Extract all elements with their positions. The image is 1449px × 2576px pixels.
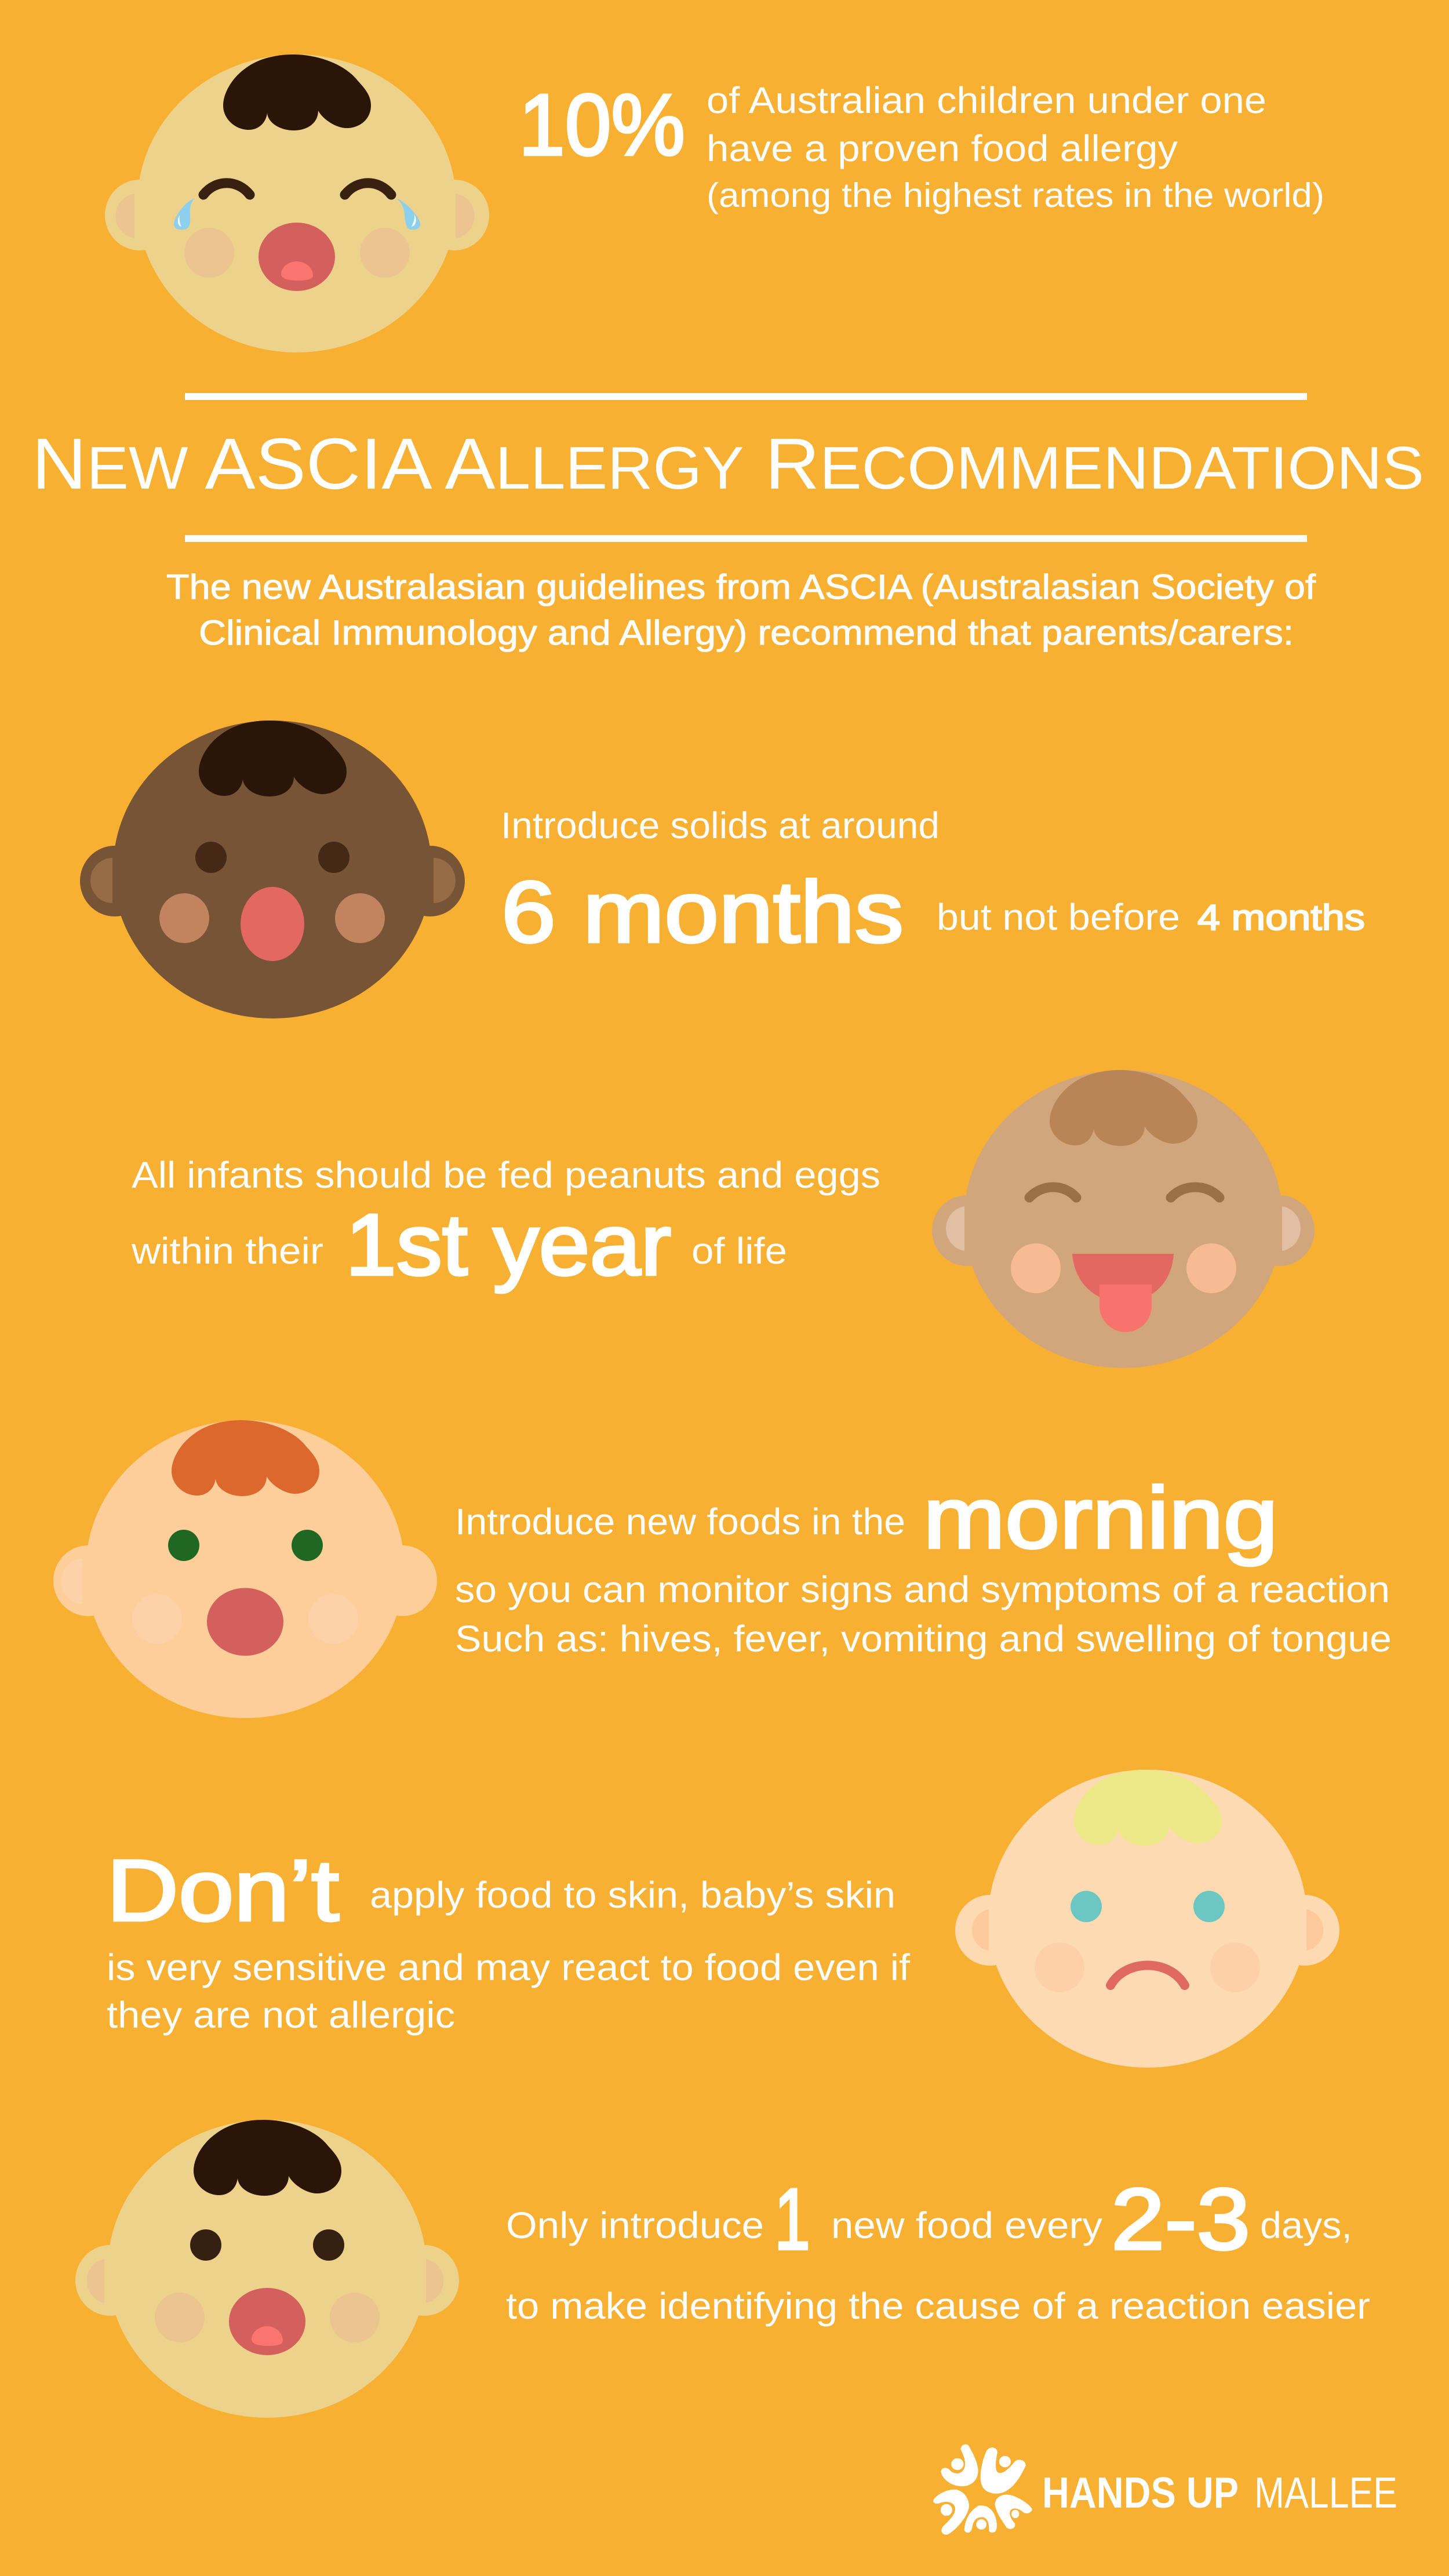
text block: allergy statistic: have a proven food allergy	[707, 128, 1178, 169]
text block: introduce in the morning: morning	[923, 1469, 1278, 1566]
icon: dark-skinned baby face	[80, 721, 465, 1018]
tongue	[1100, 1285, 1152, 1332]
cheeks	[1035, 1942, 1260, 1992]
text block: introduce solids: 4 months	[1197, 898, 1365, 938]
text block: one new food every 2-3 days: new food every	[831, 2204, 1102, 2246]
text block: peanuts and eggs: within their	[131, 1230, 323, 1272]
text block: introduce in the morning: so you can monitor signs and symptoms of a reaction	[455, 1569, 1390, 1610]
text block: peanuts and eggs: All infants should be fed peanuts and eggs	[132, 1154, 880, 1196]
cheeks	[155, 2293, 380, 2342]
mouth	[207, 1588, 283, 1656]
mouth	[1072, 1254, 1174, 1302]
text block: don't apply food to skin: they are not allergic	[107, 1994, 455, 2036]
text block: don't apply food to skin	[107, 1842, 910, 2036]
text block: introduce solids: 6 months	[501, 863, 904, 960]
open mouth	[259, 223, 335, 291]
cheeks	[184, 228, 410, 278]
eyes	[195, 842, 349, 873]
closed eyes	[1029, 1187, 1219, 1198]
text block: allergy statistic: (among the highest rates in the world)	[707, 176, 1324, 214]
eyes	[190, 2229, 344, 2261]
icon: frowning baby face	[955, 1770, 1339, 2068]
logo: Hands Up Mallee	[934, 2445, 1397, 2534]
hair	[194, 2120, 341, 2196]
text block: one new food every 2-3 days: 1	[774, 2170, 810, 2268]
text block: introduce solids	[501, 805, 1365, 960]
logo: Hands Up Mallee: HANDS UP	[1042, 2468, 1239, 2517]
text block: peanuts and eggs: of life	[691, 1230, 787, 1272]
icon: five hands-up figures	[934, 2445, 1031, 2534]
open mouth	[229, 2288, 305, 2355]
logo: Hands Up Mallee: MALLEE	[1254, 2468, 1397, 2517]
text block: one new food every 2-3 days	[506, 2170, 1370, 2327]
cheeks	[1011, 1243, 1236, 1293]
text block: introduce solids: Introduce solids at around	[501, 805, 940, 846]
title: NEW ASCIA ALLERGY RECOMMENDATIONS	[32, 424, 1424, 504]
tears	[174, 198, 420, 230]
hair	[223, 54, 371, 130]
intro text	[166, 567, 1316, 652]
text block: don't apply food to skin: Don’t	[107, 1842, 339, 1939]
text block: one new food every 2-3 days: 2-3	[1111, 2170, 1250, 2268]
text block: one new food every 2-3 days: to make identifying the cause of a reaction easier	[506, 2285, 1370, 2327]
hair	[199, 721, 347, 796]
eyes	[168, 1530, 323, 1561]
closed eyes	[203, 183, 391, 195]
icon: tongue-out baby face	[932, 1070, 1315, 1368]
text block: one new food every 2-3 days: Only introduce	[506, 2204, 764, 2246]
text block: allergy statistic	[707, 79, 1324, 214]
cheeks	[159, 893, 385, 943]
text block: one new food every 2-3 days: days,	[1260, 2204, 1352, 2246]
icon: crying baby face	[105, 54, 489, 352]
text block: allergy statistic: of Australian children under one	[707, 79, 1266, 121]
text block: peanuts and eggs	[131, 1154, 880, 1293]
text block: introduce in the morning: Introduce new foods in the	[455, 1501, 905, 1542]
stat: 10%: 10%	[519, 76, 685, 173]
intro text: Clinical Immunology and Allergy) recommend that parents/carers:	[199, 613, 1294, 652]
text block: don't apply food to skin: is very sensitive and may react to food even if	[107, 1946, 910, 1988]
text block: don't apply food to skin: apply food to skin, baby’s skin	[370, 1874, 895, 1916]
text block: introduce in the morning	[455, 1469, 1392, 1660]
hair	[172, 1420, 319, 1496]
icon: dark-haired baby face	[75, 2120, 459, 2418]
cheeks	[132, 1594, 358, 1644]
hair	[1050, 1070, 1197, 1146]
frown mouth	[1111, 1965, 1185, 1985]
icon: red-haired baby face	[53, 1420, 437, 1718]
text block: peanuts and eggs: 1st year	[345, 1196, 671, 1293]
mouth	[241, 887, 304, 961]
eyes	[1071, 1891, 1225, 1922]
hair	[1074, 1770, 1222, 1846]
text block: introduce solids: but not before	[937, 896, 1180, 938]
intro text: The new Australasian guidelines from ASCIA (Australasian Society of	[166, 567, 1316, 606]
text block: introduce in the morning: Such as: hives, fever, vomiting and swelling of tongue	[455, 1618, 1392, 1660]
